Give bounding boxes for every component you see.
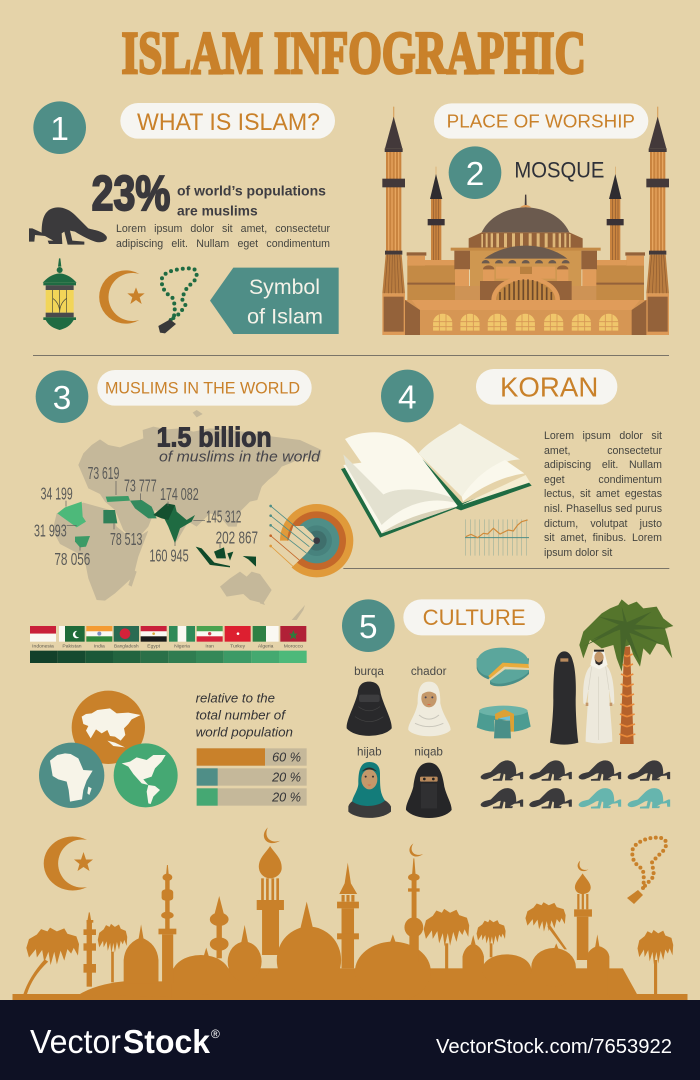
callout: symbol of Islam: of Islam [247,304,323,328]
heading: culture: CULTURE [423,605,526,630]
line chart [465,519,529,556]
world map [53,410,322,620]
crescents on minarets [264,827,588,871]
footer logo: Stock [123,1023,211,1060]
statistic caption: of world’s populations [177,183,326,198]
heading: Muslims in the world [97,370,312,406]
palm trees [23,902,673,995]
title: ISLAM INFOGRAPHIC [122,20,586,87]
divider [33,354,669,356]
caption: world population [196,725,293,739]
country population figures [34,463,258,569]
bar: 20 percent: 20 % [271,791,301,805]
number badge 5: 5 [359,609,378,646]
heading: Koran [476,369,617,405]
globes [39,691,178,808]
heading: culture [403,599,545,635]
number badge 4 [381,370,434,422]
labels: head coverings: burqa [354,665,384,678]
labels: head coverings: chador [411,665,447,678]
text block: what is Islam description: adipiscing elit. Nullam eget condimentum [116,238,330,250]
Muslim-majority countries on the map [57,496,256,567]
country population figures: 174 082 [160,484,199,504]
icon: lantern [43,258,77,330]
flag labels [32,643,303,649]
footer url: VectorStock.com/7653922 [436,1036,672,1058]
figure: hijab [348,762,391,818]
caption [196,691,293,739]
figure: niqab [406,763,452,818]
skyline [13,827,688,1002]
labels: head coverings: niqab [414,746,443,759]
number badge 4: 4 [398,379,417,416]
leader lines [66,481,220,551]
footer logo: ® [211,1027,220,1041]
text block: Koran description: Lorem ipsum dolor sit [544,430,662,442]
heading: what is Islam: WHAT IS ISLAM? [137,110,320,136]
number badge 1: 1 [50,111,69,148]
text block: Koran description: lectus, sit amet egestas [544,488,662,500]
text block: Koran description: amet, consectetur [544,445,662,457]
number badge 5 [342,599,395,652]
country population figures: 78 513 [110,529,142,549]
number badge 1 [33,101,86,154]
text block: Koran description: dictum, volutpat justo [544,518,662,530]
flag labels: Iran [205,643,214,649]
caption: total number of [196,708,287,722]
people pictogram: row one [481,760,670,781]
figure: chador [408,682,451,736]
panel: culture [342,599,673,818]
country population figures: 145 312 [206,506,241,526]
icon: prayer beads [158,268,197,333]
illustration: palm tree [579,599,673,744]
text block: Koran description: adipiscing elit. Nullam [544,459,662,471]
heading: place of worship [434,103,648,139]
flag labels: Nigeria [174,643,190,649]
flag labels: Algeria [258,643,274,649]
text block: what is Islam description [116,223,330,250]
figure: man in white [583,649,614,743]
number badge 2 [449,146,501,199]
flag labels: Pakistan [62,643,82,649]
bar: 60 percent [197,748,307,766]
statistic: 23%: 23% [92,166,170,221]
flag labels: Morocco [284,643,303,649]
callout: symbol of Islam: Symbol [249,275,320,299]
labels: head coverings: hijab [357,746,382,759]
icon: praying man [29,207,107,245]
flags row [30,626,306,642]
panel: population share [39,691,307,808]
icon: crescent and star [99,270,145,324]
text block: Koran description [544,430,662,559]
icon: crescent and star footer [44,837,93,890]
statistic: 1.5 billion: 1.5 billion [157,422,272,453]
flag labels: Egypt [147,643,161,649]
illustration: mosque [382,107,669,335]
country population figures: 73 619 [88,463,119,483]
country population figures: 73 777 [124,476,157,496]
heading: what is Islam [120,103,335,139]
illustration: open book [341,423,532,538]
minaret group [83,846,592,987]
bar: 20 percent: 20 % [271,771,301,785]
callout: symbol of Islam [210,268,339,334]
text block: Koran description: ipsum dolor sit [544,547,612,559]
country population figures: 78 056 [54,549,90,569]
footer logo [30,1023,220,1060]
number badge 3: 3 [53,380,71,417]
heading: Muslims in the world: MUSLIMS IN THE WORLD [105,378,300,397]
heading: place of worship: PLACE OF WORSHIP [447,110,635,131]
icon: platform model [477,706,531,738]
panel: Muslims in the world [30,370,353,663]
figure: burqa [347,682,392,736]
country population figures: 202 867 [216,527,258,547]
panel: Koran [341,369,669,568]
number badge 3 [36,370,88,423]
bar: 60 percent: 60 % [272,751,301,765]
text block: Koran description: nisl. Phasellus sed purus [544,503,662,515]
icon: prayer beads footer [627,838,666,904]
caption: relative to the [196,691,275,705]
flag labels: India [94,643,105,649]
chart: pie [477,648,529,686]
figure: woman in black [550,651,578,745]
text block: Koran description: sit amet, finibus. Lorem [544,532,662,544]
labels: head coverings [354,665,447,759]
bar: 20 percent [197,788,307,806]
label: mosque: MOSQUE [514,157,604,182]
footer logo: Vector [30,1023,121,1060]
statistic caption: are muslims [177,203,258,218]
flag labels: Turkey [230,643,246,649]
bar: 20 percent [197,768,307,786]
statistic caption [177,183,326,218]
text block: Koran description: eget condimentum [544,474,662,486]
panel: what is Islam [29,101,339,334]
country population figures: 31 993 [34,521,67,541]
footer bar [0,1000,700,1080]
people pictogram: row two [481,788,670,808]
flag labels: Indonesia [32,643,54,649]
country population figures: 34 199 [41,483,73,503]
flag labels: Bangladesh [114,643,139,649]
text block: what is Islam description: Lorem ipsum dolor sit amet, consectetur [116,223,330,235]
divider [343,567,669,570]
radial chart [263,504,353,577]
colour scale [30,651,307,663]
heading: Koran: KORAN [500,372,598,403]
number badge 2: 2 [466,156,484,193]
country population figures: 160 945 [149,546,189,566]
panel: place of worship [382,103,669,335]
statistic caption: of muslims in the world [159,450,321,466]
